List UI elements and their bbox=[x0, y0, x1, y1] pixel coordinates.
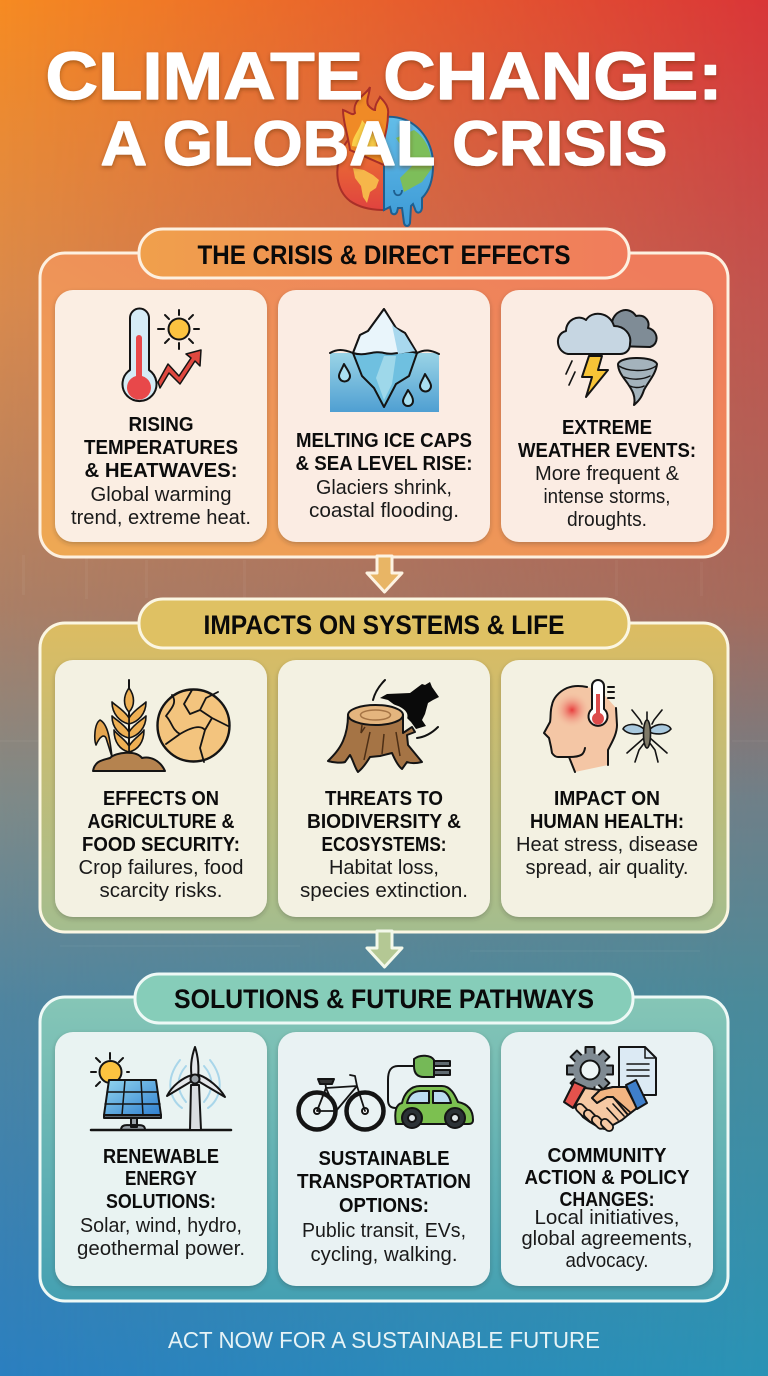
text: rising temperatures: & HEATWAVES: bbox=[84, 460, 238, 482]
text: extreme weather: EXTREME bbox=[562, 417, 652, 439]
text: sustainable transportation: OPTIONS: bbox=[339, 1195, 429, 1217]
text: sustainable transportation: TRANSPORTATION bbox=[297, 1171, 471, 1193]
text: melting ice caps bbox=[296, 430, 472, 522]
section heading: solutions: SOLUTIONS & FUTURE PATHWAYS bbox=[174, 984, 594, 1014]
text: human health bbox=[516, 788, 698, 879]
card: rising temperatures bbox=[55, 290, 267, 542]
text: community action: CHANGES: bbox=[560, 1189, 654, 1211]
text: extreme weather bbox=[518, 417, 696, 531]
text: extreme weather: More frequent & bbox=[535, 463, 680, 485]
text: melting ice caps: coastal flooding. bbox=[309, 500, 459, 522]
icon: solar panel and wind turbine bbox=[91, 1047, 231, 1130]
panel: solutions and future pathways bbox=[40, 974, 728, 1301]
arrow: crisis to impacts bbox=[367, 556, 402, 592]
icon: gear, document and handshake bbox=[564, 1047, 656, 1133]
text: agriculture: AGRICULTURE & bbox=[88, 811, 234, 833]
text: biodiversity: BIODIVERSITY & bbox=[307, 811, 461, 833]
text: renewable energy: geothermal power. bbox=[77, 1238, 245, 1260]
icon: burning and melting globe bbox=[337, 87, 433, 226]
title: A GLOBAL CRISIS bbox=[100, 109, 668, 179]
text: community action: advocacy. bbox=[566, 1250, 648, 1272]
card: agriculture bbox=[55, 660, 267, 917]
section heading: the crisis: THE CRISIS & DIRECT EFFECTS bbox=[198, 240, 570, 270]
title: CLIMATE CHANGE: bbox=[46, 39, 722, 114]
card: melting ice caps bbox=[278, 290, 490, 542]
card: sustainable transportation bbox=[278, 1032, 490, 1286]
text: melting ice caps: MELTING ICE CAPS bbox=[296, 430, 472, 452]
text: biodiversity: ECOSYSTEMS: bbox=[322, 834, 446, 856]
text: rising temperatures: TEMPERATURES bbox=[84, 437, 238, 459]
text: human health: Heat stress, disease bbox=[516, 834, 698, 856]
icon: bicycle and electric car bbox=[298, 1056, 473, 1130]
panel: impacts on systems and life bbox=[40, 599, 728, 932]
text: agriculture bbox=[78, 788, 244, 902]
text: biodiversity: Habitat loss, bbox=[329, 857, 439, 879]
section heading: impacts: IMPACTS ON SYSTEMS & LIFE bbox=[204, 610, 564, 640]
panel: the crisis and direct effects bbox=[40, 229, 728, 557]
text: sustainable transportation bbox=[297, 1148, 471, 1266]
text: rising temperatures: RISING bbox=[128, 414, 194, 436]
text: biodiversity: THREATS TO bbox=[325, 788, 443, 810]
text: agriculture: scarcity risks. bbox=[100, 880, 222, 902]
text: rising temperatures: Global warming bbox=[90, 484, 232, 506]
icon: iceberg and water bbox=[330, 309, 439, 412]
title bbox=[46, 39, 722, 179]
text: renewable energy bbox=[77, 1146, 245, 1260]
text: human health: HUMAN HEALTH: bbox=[530, 811, 684, 833]
arrow: impacts to solutions bbox=[367, 931, 402, 967]
icon: tree stump and animal silhouette bbox=[328, 680, 439, 772]
text: community action: ACTION & POLICY bbox=[524, 1167, 690, 1189]
icon: storm clouds, lightning and tornado bbox=[558, 310, 657, 405]
text: extreme weather: droughts. bbox=[567, 509, 647, 531]
text: sustainable transportation: Public transit, EVs, bbox=[302, 1220, 466, 1242]
text: biodiversity bbox=[300, 788, 468, 902]
text: agriculture: EFFECTS ON bbox=[103, 788, 219, 810]
text: human health: spread, air quality. bbox=[526, 857, 688, 879]
card: extreme weather bbox=[501, 290, 713, 542]
text: renewable energy: ENERGY bbox=[125, 1168, 198, 1190]
text: sustainable transportation: SUSTAINABLE bbox=[318, 1148, 450, 1170]
text: extreme weather: WEATHER EVENTS: bbox=[518, 440, 696, 462]
text: community action: COMMUNITY bbox=[548, 1145, 667, 1167]
section heading: solutions bbox=[135, 974, 633, 1023]
icon: thermometer, sun and rising arrow bbox=[122, 309, 201, 401]
card: human health bbox=[501, 660, 713, 917]
text: human health: IMPACT ON bbox=[554, 788, 660, 810]
text: rising temperatures: trend, extreme heat. bbox=[71, 507, 251, 529]
card: biodiversity bbox=[278, 660, 490, 917]
text: biodiversity: species extinction. bbox=[300, 880, 468, 902]
text: sustainable transportation: cycling, walking. bbox=[310, 1244, 458, 1266]
text: rising temperatures bbox=[71, 414, 251, 529]
card: renewable energy bbox=[55, 1032, 267, 1286]
text: extreme weather: intense storms, bbox=[544, 486, 670, 508]
text: community action bbox=[522, 1145, 692, 1272]
text: renewable energy: RENEWABLE bbox=[103, 1146, 219, 1168]
card: community action bbox=[501, 1032, 713, 1286]
icon: wheat and cracked earth bbox=[93, 680, 230, 771]
text: melting ice caps: Glaciers shrink, bbox=[316, 477, 452, 499]
text: community action: global agreements, bbox=[522, 1228, 692, 1250]
text: melting ice caps: & SEA LEVEL RISE: bbox=[296, 453, 472, 475]
footer call to action: ACT NOW FOR A SUSTAINABLE FUTURE bbox=[168, 1327, 600, 1353]
text: agriculture: FOOD SECURITY: bbox=[82, 834, 240, 856]
text: agriculture: Crop failures, food bbox=[78, 857, 244, 879]
section heading: the crisis bbox=[139, 229, 629, 278]
icon: head with fever and mosquito bbox=[544, 680, 671, 772]
section heading: impacts bbox=[139, 599, 629, 648]
text: community action: Local initiatives, bbox=[534, 1207, 680, 1229]
text: renewable energy: SOLUTIONS: bbox=[106, 1191, 216, 1213]
text: renewable energy: Solar, wind, hydro, bbox=[80, 1215, 242, 1237]
